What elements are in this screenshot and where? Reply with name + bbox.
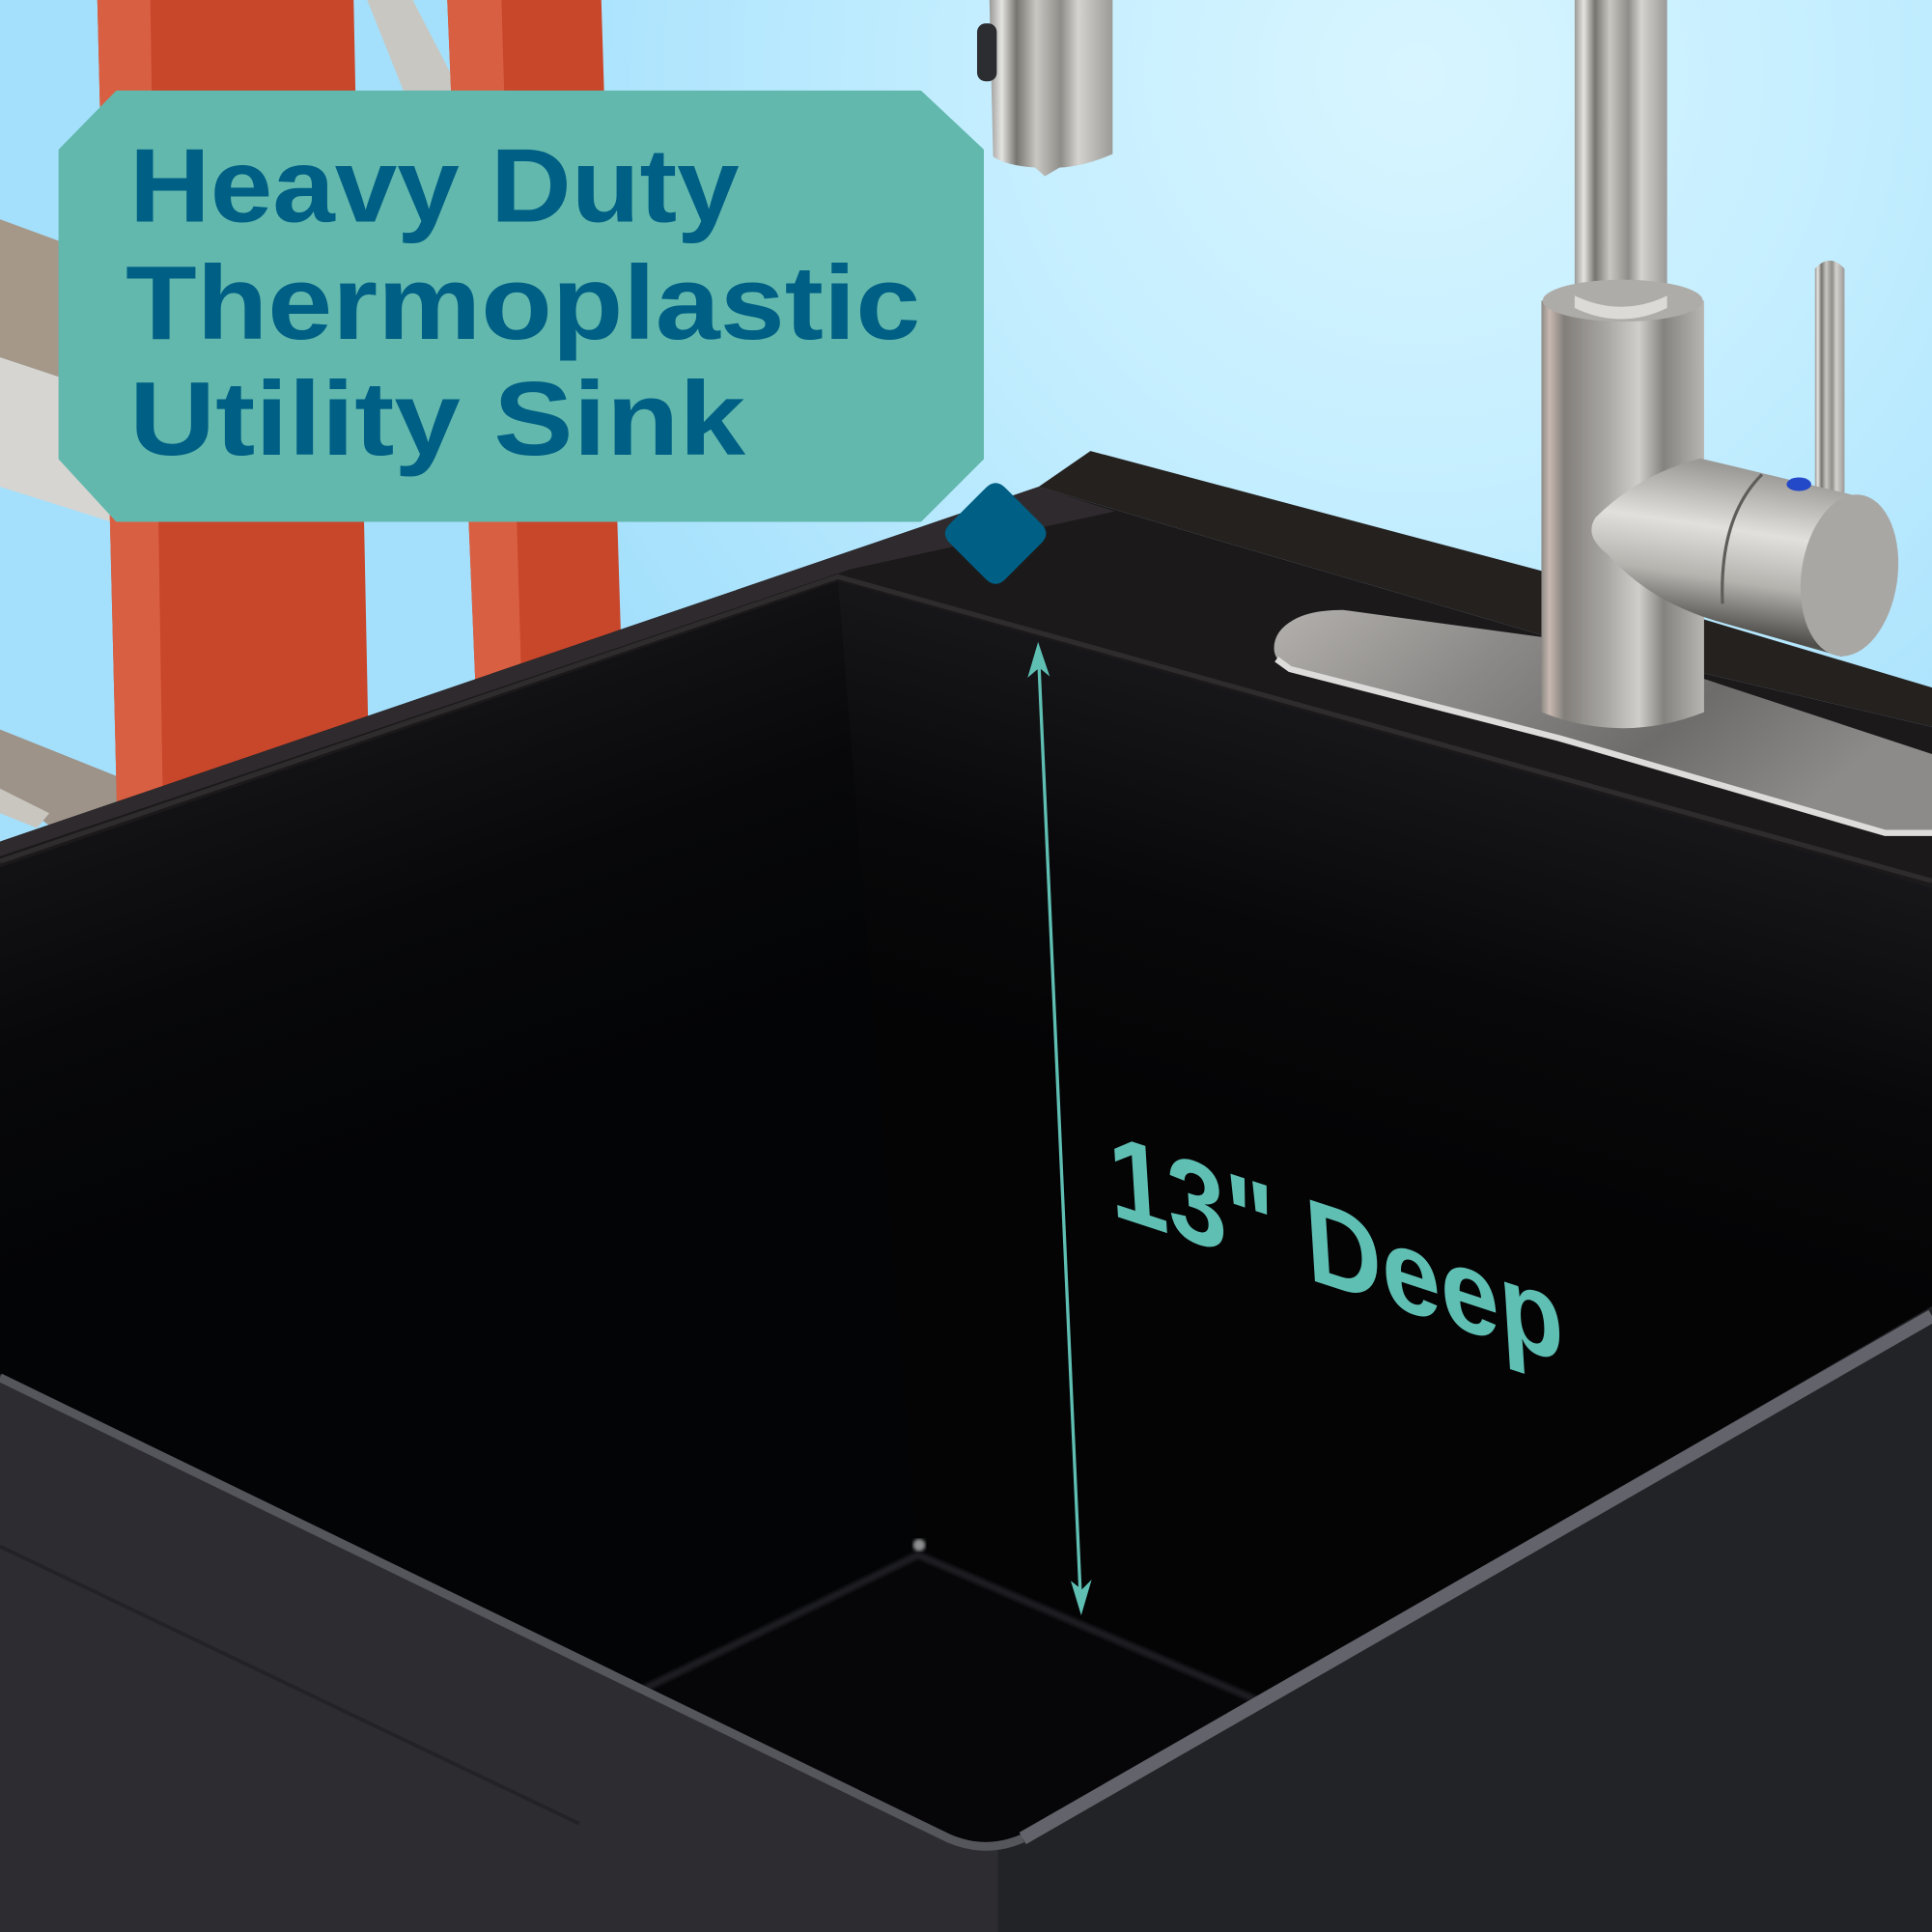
sink front body bbox=[0, 1294, 1932, 1932]
faucet spout pipe bbox=[1575, 0, 1667, 308]
title text: Utility Sink bbox=[129, 360, 746, 477]
drain corner highlight bbox=[913, 1539, 925, 1552]
title text bbox=[126, 127, 920, 477]
depth arrow bbox=[1027, 642, 1092, 1615]
sprayer head bbox=[977, 0, 1112, 176]
faucet plate bbox=[1274, 610, 1932, 834]
title text: Thermoplastic bbox=[126, 244, 920, 361]
sink inner rim edges bbox=[0, 576, 1932, 1846]
sink top rim bbox=[0, 487, 1932, 887]
backsplash bbox=[1039, 451, 1932, 727]
front body seam bbox=[0, 1547, 579, 1824]
depth label: 13" Deep bbox=[1105, 1107, 1567, 1388]
basin underlay bbox=[0, 581, 1932, 1835]
faucet handle cylinder bbox=[1591, 459, 1855, 657]
right ladder rail bbox=[447, 0, 621, 690]
left ladder rail bbox=[98, 0, 369, 813]
diamond marker bbox=[945, 483, 1046, 584]
title text: Heavy Duty bbox=[129, 127, 740, 244]
floor seams bbox=[641, 1554, 1263, 1703]
ladder hook bbox=[367, 0, 451, 98]
ladder steps bbox=[0, 219, 117, 828]
title banner bbox=[61, 93, 982, 520]
basin left wall bbox=[0, 581, 918, 1691]
ladder bbox=[0, 0, 621, 828]
faucet bbox=[1541, 0, 1909, 728]
basin right wall bbox=[838, 581, 1932, 1700]
blue indicator dot bbox=[1786, 478, 1811, 491]
faucet lever bbox=[1815, 261, 1844, 503]
faucet base cylinder bbox=[1541, 300, 1704, 728]
basin floor bbox=[641, 1554, 1257, 1845]
handle seam bbox=[1722, 474, 1762, 603]
basin bbox=[0, 581, 1932, 1845]
sprayer button bbox=[977, 23, 996, 81]
handle end cap bbox=[1790, 489, 1909, 662]
